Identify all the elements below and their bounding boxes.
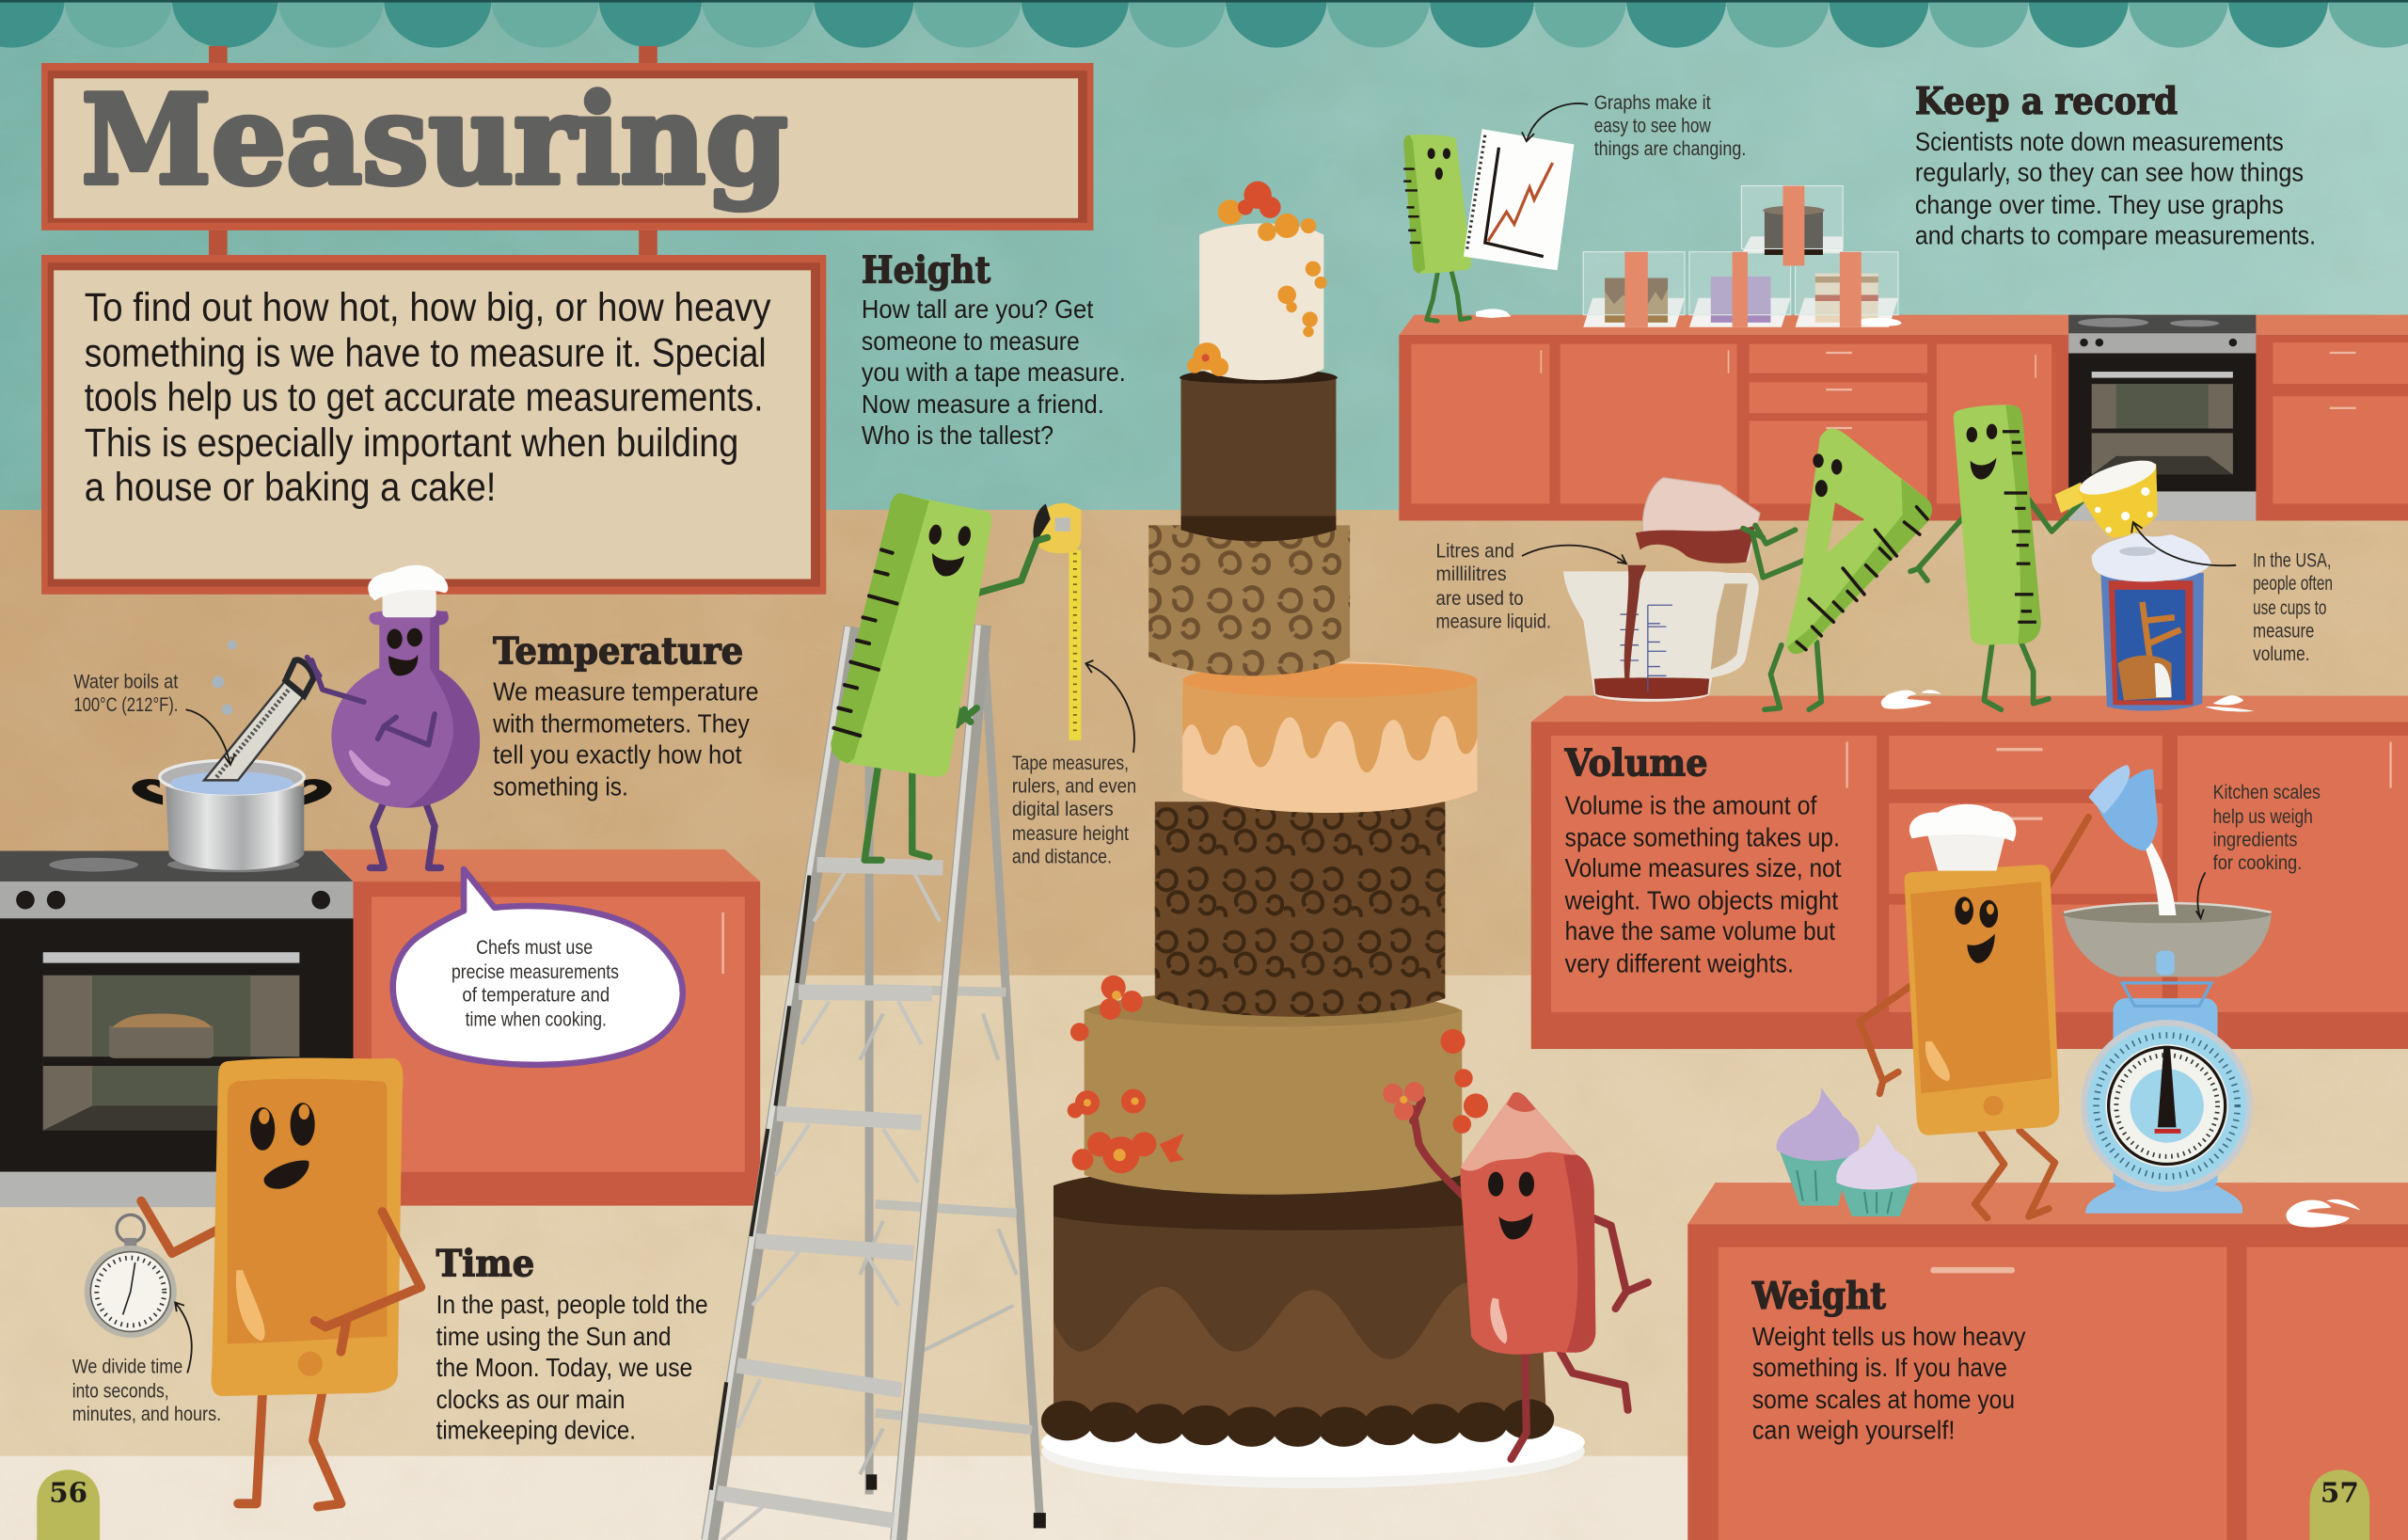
body text: We measure temperature bbox=[493, 676, 759, 706]
note: USA cups bbox=[2253, 549, 2333, 665]
rungs bbox=[717, 865, 943, 1520]
heading: Weight bbox=[1751, 1275, 1886, 1318]
flour splashes bbox=[1476, 309, 2360, 1228]
body text bbox=[1752, 1322, 2026, 1445]
ribbons bbox=[1624, 186, 1861, 327]
body text: In the past, people told the bbox=[436, 1290, 708, 1319]
page number 57 bbox=[2310, 1469, 2369, 1540]
blue cup bbox=[2088, 765, 2158, 850]
swirl chocolate tier bbox=[1155, 802, 1445, 1017]
pouring jug bbox=[1636, 478, 1760, 564]
weight counter bbox=[1687, 1183, 2408, 1540]
tape measure bbox=[1034, 503, 1081, 740]
character: orange phone with chef hat bbox=[1860, 804, 2088, 1218]
boxed cake samples bbox=[1583, 186, 1898, 327]
note: water boils: Water boils at bbox=[73, 671, 178, 692]
patterned tier bbox=[1149, 525, 1350, 675]
body text bbox=[1564, 790, 1842, 977]
yellow measuring cup bbox=[2054, 453, 2160, 537]
pot of boiling water bbox=[132, 641, 332, 870]
body text: have the same volume but bbox=[1565, 916, 1835, 945]
body text: tell you exactly how hot bbox=[493, 739, 742, 769]
piped bead border bbox=[1041, 1399, 1554, 1447]
body text: clocks as our main bbox=[436, 1385, 625, 1414]
body text: Weight tells us how heavy bbox=[1752, 1322, 2026, 1351]
dark chocolate tier bbox=[1180, 369, 1338, 541]
note: USA cups: measure bbox=[2253, 621, 2314, 643]
ladder bbox=[705, 625, 1046, 1540]
note: USA cups: In the USA, bbox=[2253, 549, 2331, 571]
note: graphs: easy to see how bbox=[1594, 115, 1711, 136]
chef hat bbox=[368, 565, 448, 617]
body text: some scales at home you bbox=[1752, 1385, 2015, 1414]
intro sign bbox=[41, 255, 826, 595]
body text: How tall are you? Get bbox=[862, 294, 1094, 324]
red flowers on tan tier bbox=[1068, 976, 1488, 1173]
body text: weight. Two objects might bbox=[1564, 885, 1839, 914]
note: USA cups: volume. bbox=[2253, 643, 2310, 665]
body text: regularly, so they can see how things bbox=[1915, 158, 2304, 187]
bubble text bbox=[452, 937, 619, 1031]
note: tape measures bbox=[1012, 753, 1136, 868]
body text: something is. If you have bbox=[1752, 1353, 2007, 1382]
face bbox=[1488, 1172, 1534, 1240]
upper kitchen counter with oven bbox=[1399, 315, 2408, 520]
body text: Volume measures size, not bbox=[1565, 853, 1842, 882]
section: weight bbox=[1751, 1275, 2026, 1445]
note: time: minutes, and hours. bbox=[72, 1404, 221, 1425]
dark cake box bbox=[1741, 186, 1843, 255]
section: keep a record bbox=[1915, 80, 2316, 250]
character: small green ruler with graph bbox=[1403, 129, 1574, 321]
arrow: kitchen scales bbox=[2196, 872, 2205, 918]
note: graphs: things are changing. bbox=[1594, 138, 1746, 160]
section: time bbox=[436, 1243, 708, 1445]
intro text: tools help us to get accurate measurements. bbox=[85, 375, 763, 420]
body text: with thermometers. They bbox=[492, 709, 750, 738]
bubble text: precise measurements bbox=[452, 961, 619, 983]
purple cake box bbox=[1689, 252, 1791, 323]
stopwatch bbox=[85, 1215, 177, 1338]
note: USA cups: use cups to bbox=[2253, 597, 2326, 619]
section: volume bbox=[1564, 741, 1842, 977]
character: tall green ruler bbox=[1910, 405, 2085, 709]
section: height bbox=[862, 248, 1126, 450]
face bbox=[927, 524, 973, 576]
intro text bbox=[85, 285, 771, 509]
note: water boils: 100°C (212°F). bbox=[73, 694, 178, 716]
intro text: a house or baking a cake! bbox=[85, 465, 496, 509]
face bbox=[1955, 897, 1998, 963]
heading: Height bbox=[862, 248, 990, 292]
body text: timekeeping device. bbox=[436, 1416, 636, 1445]
arrow: litres bbox=[1522, 546, 1626, 564]
body text bbox=[862, 294, 1126, 450]
note: tape measures: rulers, and even bbox=[1012, 775, 1136, 797]
left cabinet bbox=[323, 849, 760, 1206]
body text bbox=[436, 1290, 708, 1445]
note: kitchen scales: help us weigh bbox=[2213, 806, 2313, 828]
arrow: tape measures bbox=[1085, 660, 1134, 753]
bubble text: time when cooking. bbox=[466, 1009, 607, 1031]
note: graphs: Graphs make it bbox=[1594, 92, 1711, 114]
arrow: graphs bbox=[1522, 103, 1588, 141]
plates bbox=[1583, 236, 1898, 327]
body text: something is. bbox=[493, 772, 628, 802]
face bbox=[387, 628, 422, 675]
sign posts bbox=[209, 46, 657, 262]
body text: space something takes up. bbox=[1565, 823, 1840, 852]
pouring flour bbox=[2144, 837, 2176, 915]
heading: Volume bbox=[1564, 741, 1708, 785]
pink flower bbox=[1383, 1082, 1424, 1120]
cake in oven bbox=[109, 1014, 214, 1058]
body text: very different weights. bbox=[1565, 948, 1794, 977]
chocolate cake box bbox=[1583, 252, 1685, 323]
volume counter bbox=[1531, 696, 2408, 1049]
orange drip tier bbox=[1182, 661, 1478, 813]
bubble text: of temperature and bbox=[462, 984, 610, 1006]
note: litres: millilitres bbox=[1436, 564, 1507, 585]
title sign bbox=[41, 63, 1093, 230]
face bbox=[250, 1103, 315, 1189]
bottom tier bbox=[1041, 1165, 1554, 1447]
note: litres: Litres and bbox=[1436, 541, 1514, 563]
body text: Scientists note down measurements bbox=[1915, 127, 2284, 156]
kitchen scales bbox=[2063, 765, 2272, 1214]
note: tape measures: digital lasers bbox=[1012, 799, 1114, 820]
note: litres: are used to bbox=[1436, 588, 1524, 610]
graph paper bbox=[1464, 129, 1574, 270]
body text: time using the Sun and bbox=[436, 1322, 671, 1351]
face bbox=[1967, 424, 1997, 480]
note: water boils bbox=[73, 671, 178, 716]
page number 56 bbox=[37, 1469, 100, 1540]
page number 56: 56 bbox=[49, 1476, 87, 1509]
body text bbox=[492, 676, 759, 802]
base plate bbox=[1041, 1406, 1585, 1488]
character: pencil bbox=[1383, 1082, 1648, 1459]
note: kitchen scales bbox=[2213, 782, 2321, 874]
body text: Volume is the amount of bbox=[1565, 790, 1817, 819]
title: Measuring bbox=[82, 67, 788, 212]
white top tier bbox=[1199, 224, 1323, 380]
thermometer bbox=[204, 660, 313, 780]
intro text: To find out how hot, how big, or how heavy bbox=[85, 285, 771, 329]
oven bbox=[2068, 315, 2256, 520]
chef hat bbox=[1909, 804, 2016, 871]
body text: someone to measure bbox=[862, 326, 1080, 356]
body text: the Moon. Today, we use bbox=[436, 1353, 692, 1382]
intro text: something is we have to measure it. Special bbox=[85, 330, 767, 374]
tan tier bbox=[1085, 990, 1462, 1195]
bubble text: Chefs must use bbox=[476, 937, 593, 959]
arm in front of body bbox=[315, 1212, 420, 1352]
body text: Who is the tallest? bbox=[862, 421, 1054, 450]
measuring jug bbox=[1563, 478, 1760, 702]
layered cake bbox=[1041, 182, 1585, 1488]
cupcakes bbox=[1777, 1088, 1917, 1216]
note: kitchen scales: for cooking. bbox=[2213, 852, 2302, 874]
heading: Temperature bbox=[493, 629, 743, 673]
body text: change over time. They use graphs bbox=[1915, 190, 2284, 219]
body text: and charts to compare measurements. bbox=[1915, 221, 2316, 250]
note: kitchen scales: ingredients bbox=[2213, 830, 2297, 851]
rail shadow bbox=[711, 876, 809, 1490]
left stove bbox=[0, 850, 354, 1207]
arrow: time bbox=[175, 1302, 192, 1373]
character: green ruler on ladder bbox=[831, 493, 1047, 860]
page number 57: 57 bbox=[2321, 1476, 2359, 1509]
front rails bbox=[709, 625, 983, 1540]
layer cake box bbox=[1796, 252, 1898, 323]
body text: you with a tape measure. bbox=[862, 357, 1126, 387]
heading: Time bbox=[436, 1243, 534, 1286]
note: tape measures: Tape measures, bbox=[1012, 753, 1129, 774]
face bbox=[1813, 453, 1842, 497]
speech bubble bbox=[393, 869, 683, 1065]
limbs bbox=[141, 1201, 341, 1507]
note: litres bbox=[1436, 541, 1551, 633]
note: litres: measure liquid. bbox=[1436, 611, 1551, 633]
note: time bbox=[72, 1357, 221, 1425]
section: temperature bbox=[492, 629, 759, 802]
note: time: We divide time bbox=[72, 1357, 182, 1378]
note: tape measures: measure height bbox=[1012, 823, 1129, 845]
intro text: This is especially important when building bbox=[85, 421, 738, 465]
ruler ticks bbox=[834, 549, 896, 736]
note: kitchen scales: Kitchen scales bbox=[2213, 782, 2321, 803]
note: tape measures: and distance. bbox=[1012, 847, 1112, 868]
top flowers bbox=[1187, 182, 1327, 376]
arrow: water boils bbox=[186, 709, 235, 765]
rear rails bbox=[869, 629, 1039, 1517]
note: USA cups: people often bbox=[2253, 573, 2333, 595]
character: purple flask bbox=[308, 565, 480, 867]
arrow: USA cups bbox=[2131, 522, 2236, 565]
scale bowl bbox=[2063, 903, 2272, 976]
character: green set square bbox=[1743, 429, 1932, 709]
flour bag bbox=[2092, 533, 2211, 711]
note: time: into seconds, bbox=[72, 1381, 169, 1403]
body text: Now measure a friend. bbox=[862, 389, 1104, 419]
note: graphs bbox=[1594, 92, 1746, 160]
body text: can weigh yourself! bbox=[1752, 1416, 1955, 1445]
awning scallops bbox=[0, 0, 2408, 48]
character: orange phone with stopwatch bbox=[141, 1058, 420, 1507]
heading: Keep a record bbox=[1915, 80, 2178, 123]
body text bbox=[1915, 127, 2316, 250]
